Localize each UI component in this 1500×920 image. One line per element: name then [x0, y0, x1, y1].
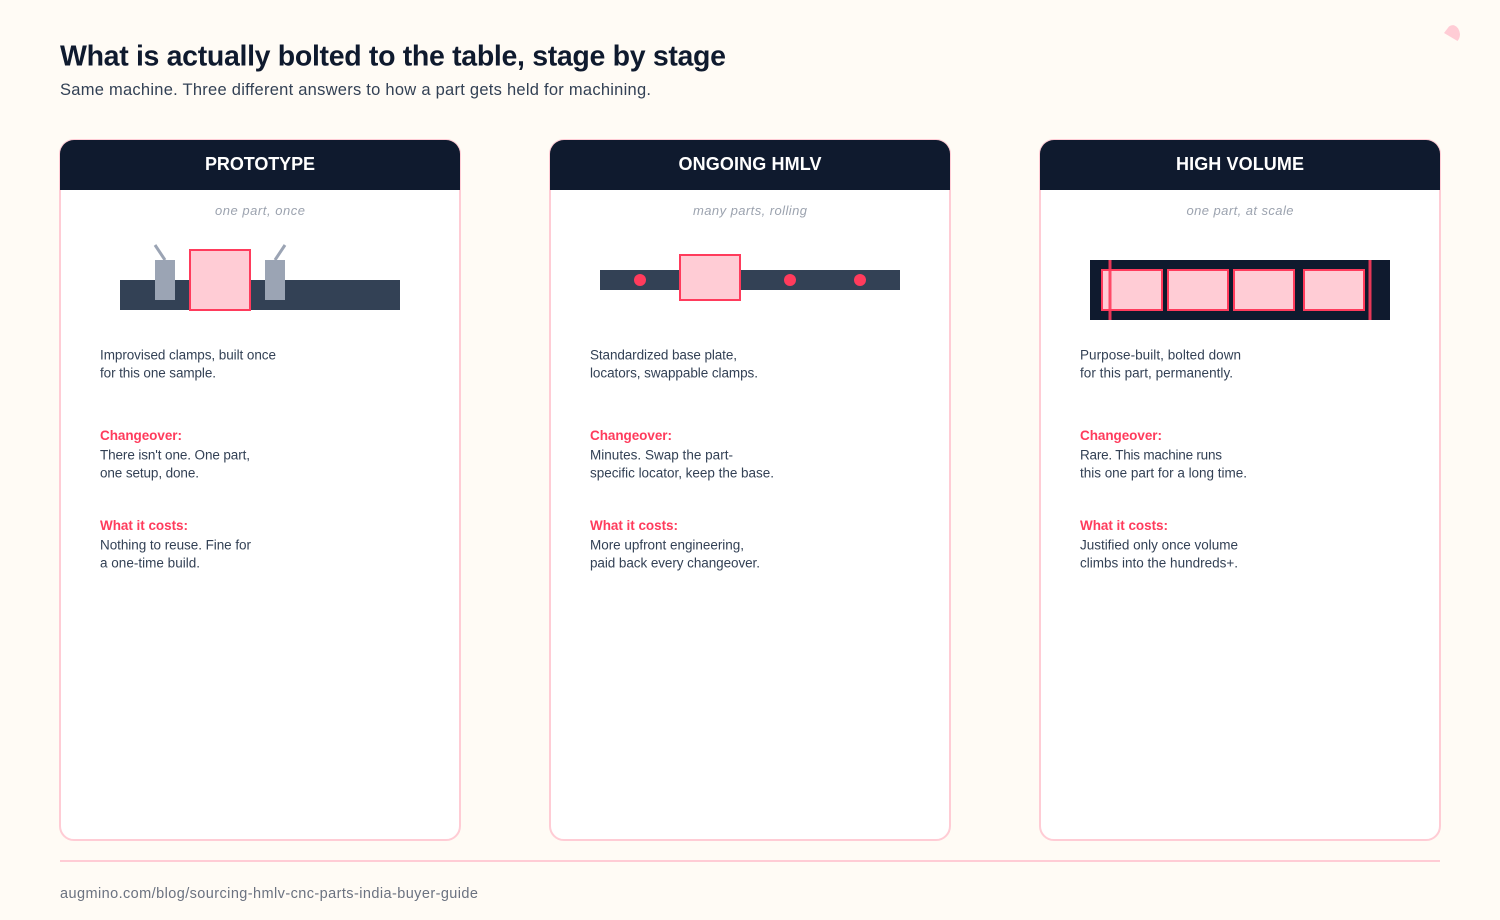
panel header: prototype: [60, 140, 460, 190]
panel header: high volume: HIGH VOLUME: [1176, 154, 1304, 174]
costs: ongoing HMLV: More upfront engineering,: [590, 538, 744, 552]
costs: high volume: [1080, 518, 1238, 570]
costs: high volume: Justified only once volume: [1080, 538, 1238, 552]
costs: ongoing HMLV: [590, 518, 760, 570]
costs: prototype: a one-time build.: [100, 556, 200, 570]
costs: prototype: Nothing to reuse. Fine for: [100, 538, 252, 552]
title: What is actually bolted to the table, stage by stage: [60, 40, 726, 72]
changeover: high volume: Rare. This machine runs: [1080, 448, 1222, 462]
changeover: prototype: one setup, done.: [100, 466, 199, 480]
description: ongoing HMLV: [590, 348, 758, 380]
icon: pink petal: [1444, 25, 1460, 41]
costs: high volume: What it costs:: [1080, 518, 1168, 533]
description: ongoing HMLV: locators, swappable clamps.: [590, 366, 758, 380]
tagline: prototype: one part, once: [215, 203, 305, 218]
panel header: ongoing HMLV: [550, 140, 950, 190]
panel header: ongoing HMLV: ONGOING HMLV: [678, 154, 822, 174]
panel: ongoing HMLV: [550, 140, 950, 840]
diagram: base plate with locators: [600, 255, 900, 300]
costs: prototype: [100, 518, 252, 570]
description: high volume: for this part, permanently.: [1080, 366, 1233, 380]
changeover: ongoing HMLV: [590, 428, 774, 480]
changeover: high volume: [1080, 428, 1247, 480]
description: prototype: [100, 348, 276, 380]
panel header: high volume: [1040, 140, 1440, 190]
diagram: dedicated fixture: [1090, 260, 1390, 320]
changeover: prototype: [100, 428, 250, 480]
description: high volume: Purpose-built, bolted down: [1080, 348, 1241, 362]
changeover: prototype: Changeover:: [100, 428, 182, 443]
changeover: ongoing HMLV: specific locator, keep the base.: [590, 466, 774, 480]
footer source url: augmino.com/blog/sourcing-hmlv-cnc-parts-india-buyer-guide: [60, 886, 478, 902]
costs: ongoing HMLV: What it costs:: [590, 518, 678, 533]
changeover: high volume: this one part for a long time.: [1080, 466, 1247, 480]
description: prototype: Improvised clamps, built once: [100, 348, 276, 362]
panel: prototype: [60, 140, 460, 840]
changeover: prototype: There isn't one. One part,: [100, 448, 250, 462]
changeover: ongoing HMLV: Changeover:: [590, 428, 672, 443]
subtitle: Same machine. Three different answers to how a part gets held for machining.: [60, 81, 651, 99]
description: ongoing HMLV: Standardized base plate,: [590, 348, 737, 362]
costs: prototype: What it costs:: [100, 518, 188, 533]
description: high volume: [1080, 348, 1241, 380]
diagram: improvised clamps: [120, 245, 400, 310]
changeover: ongoing HMLV: Minutes. Swap the part-: [590, 448, 733, 462]
tagline: ongoing HMLV: many parts, rolling: [693, 203, 808, 218]
panel header: prototype: PROTOTYPE: [205, 154, 315, 174]
description: prototype: for this one sample.: [100, 366, 216, 380]
tagline: high volume: one part, at scale: [1186, 203, 1294, 218]
costs: ongoing HMLV: paid back every changeover.: [590, 556, 760, 570]
costs: high volume: climbs into the hundreds+.: [1080, 556, 1238, 570]
changeover: high volume: Changeover:: [1080, 428, 1162, 443]
panel: high volume: [1040, 140, 1440, 840]
